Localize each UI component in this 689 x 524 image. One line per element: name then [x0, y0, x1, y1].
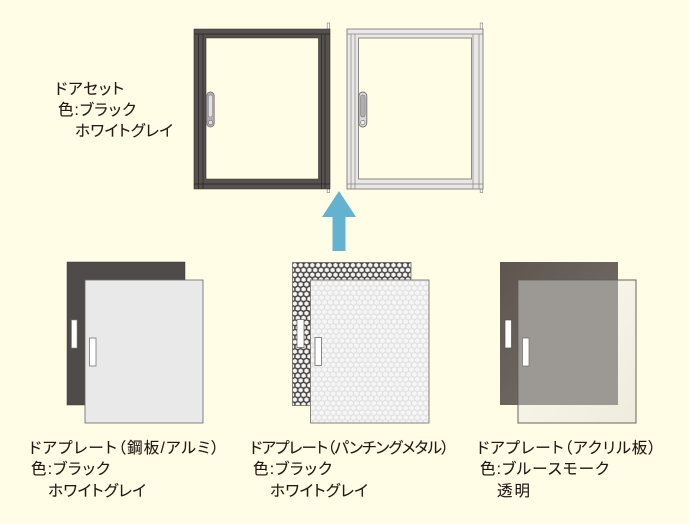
- label: steel / aluminium plate: [29, 439, 219, 500]
- label: perforated metal plate: [250, 439, 449, 500]
- door set: black: [194, 23, 330, 192]
- label: steel / aluminium plate: 色:ブラック: [31, 459, 110, 478]
- plate set: steel / aluminium: [67, 262, 203, 423]
- handle: [207, 92, 214, 127]
- plate set: perforated metal: [292, 262, 429, 423]
- arrow: upward: [322, 191, 356, 251]
- label: perforated metal plate: ドアプレート（パンチングメタル）: [250, 439, 449, 457]
- door set label: ドアセット: [55, 81, 124, 98]
- door set label: ホワイトグレイ: [75, 122, 173, 140]
- label: acrylic plate: ドアプレート（アクリル板）: [477, 439, 656, 457]
- label: steel / aluminium plate: ドアプレート（鋼板/アルミ）: [29, 439, 219, 457]
- plate set: acrylic: [500, 262, 636, 423]
- label: perforated metal plate: ホワイトグレイ: [270, 482, 368, 500]
- label: perforated metal plate: 色:ブラック: [253, 459, 332, 478]
- door set: white gray: [347, 23, 483, 192]
- label: acrylic plate: 透明: [497, 482, 530, 500]
- label: steel / aluminium plate: ホワイトグレイ: [48, 482, 146, 500]
- handle: [359, 92, 367, 127]
- door set label: [55, 81, 173, 140]
- label: acrylic plate: 色:ブルースモーク: [480, 459, 609, 478]
- label: acrylic plate: [477, 439, 656, 500]
- door set label: 色:ブラック: [58, 100, 136, 119]
